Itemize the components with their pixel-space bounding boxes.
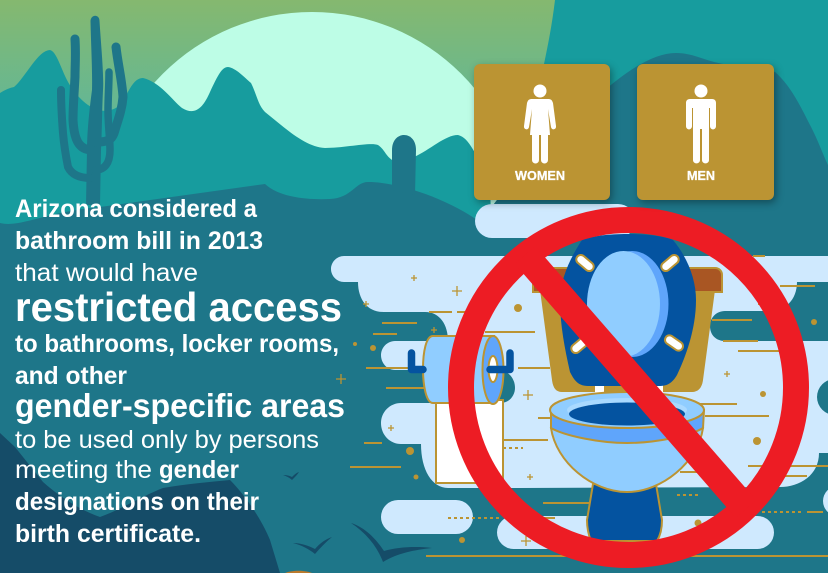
main text block: to bathrooms, locker rooms, xyxy=(15,330,339,358)
main text block: that would have xyxy=(15,259,198,287)
seat lid xyxy=(560,234,696,386)
main text block: Arizona considered a xyxy=(15,195,258,223)
cloud: right edge xyxy=(823,486,828,516)
bowl opening xyxy=(569,402,685,426)
cloud: lower left xyxy=(381,500,473,534)
main text block xyxy=(15,195,345,548)
right edge dark bump xyxy=(817,379,828,415)
roll side xyxy=(482,336,504,404)
cloud: upper band xyxy=(331,256,828,488)
rim inner xyxy=(567,398,687,422)
tank xyxy=(540,290,715,392)
main text block: designations on their xyxy=(15,488,259,516)
saguaro cactus xyxy=(61,16,123,205)
main text block: birth certificate. xyxy=(15,520,201,548)
women sign xyxy=(474,64,610,200)
bird: medium xyxy=(293,537,332,554)
prohibition sign xyxy=(461,220,796,555)
toilet roll xyxy=(412,336,510,483)
women figure xyxy=(524,84,556,164)
tank lid xyxy=(533,268,722,292)
bowl band xyxy=(551,410,704,443)
red ring xyxy=(461,220,796,555)
bird: small xyxy=(283,472,299,480)
trunk xyxy=(86,16,103,205)
arms xyxy=(61,39,123,178)
gold speed lines xyxy=(350,256,828,556)
seat oval xyxy=(587,251,660,357)
clouds xyxy=(331,204,828,549)
pedestal xyxy=(587,484,662,541)
barrel cactus xyxy=(392,135,416,195)
main text block: restricted access xyxy=(15,284,342,330)
main text block: and other xyxy=(15,362,127,390)
seat shade xyxy=(596,251,668,357)
main text block: gender xyxy=(159,456,239,484)
paper sheet xyxy=(436,400,503,483)
holder xyxy=(412,353,510,370)
rim xyxy=(550,392,704,428)
main text block: gender-specific areas xyxy=(15,387,345,424)
roll body xyxy=(423,336,494,403)
gold dots xyxy=(353,304,817,543)
bowl xyxy=(551,428,703,492)
gold plus marks xyxy=(336,275,730,546)
men label: MEN xyxy=(687,168,715,183)
roll hole xyxy=(488,356,498,382)
men sign xyxy=(637,64,774,200)
red diagonal xyxy=(525,255,746,509)
hinges xyxy=(595,385,663,394)
bird: large xyxy=(351,523,432,562)
men figure xyxy=(686,84,716,163)
lower left dark mountain xyxy=(0,433,280,573)
main text block: to be used only by persons xyxy=(15,426,319,454)
sky background xyxy=(0,0,828,125)
cloud: top xyxy=(475,204,635,238)
moon xyxy=(101,12,523,434)
orange sliver xyxy=(285,571,312,573)
women label: WOMEN xyxy=(515,168,565,183)
bolts xyxy=(569,253,685,355)
cloud: lower right xyxy=(497,516,774,549)
main text block: meeting the xyxy=(15,456,152,484)
main text block: bathroom bill in 2013 xyxy=(15,227,263,255)
toilet xyxy=(533,234,722,541)
